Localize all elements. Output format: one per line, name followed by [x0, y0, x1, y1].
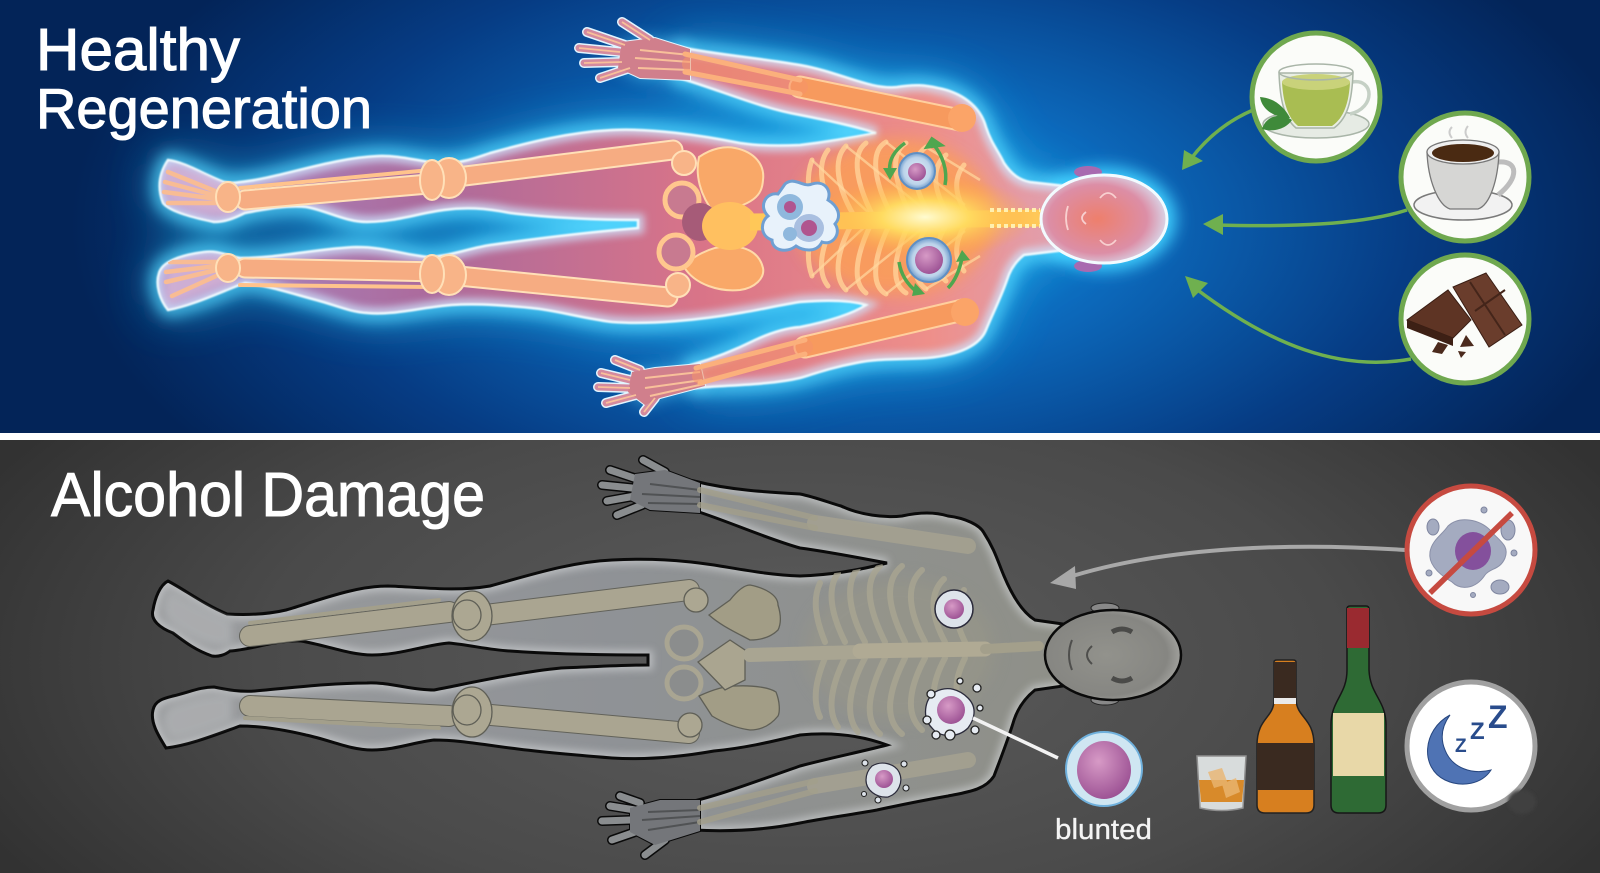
- title: healthy regeneration: Regeneration: [36, 77, 372, 141]
- leg bones: [245, 590, 689, 733]
- stem cell lower: [907, 238, 951, 282]
- hands: [602, 460, 700, 855]
- icon: sleep moon and zzz: Z: [1470, 718, 1485, 745]
- title: alcohol damage: Alcohol Damage: [51, 461, 485, 530]
- spine with glowing core: [750, 175, 1045, 259]
- knee and ankle joints: [216, 151, 696, 297]
- knee joints: [452, 588, 708, 737]
- pelvis: [659, 147, 763, 290]
- stem cell upper: [899, 153, 935, 189]
- panel: alcohol damage: [0, 440, 1600, 873]
- macrophage cell: [762, 181, 839, 250]
- spine and sternum: [750, 646, 1040, 655]
- label: blunted: blunted: [1055, 814, 1152, 846]
- icon: coffee: [1401, 113, 1529, 241]
- grey arrow to body: [1050, 547, 1405, 589]
- icon: no cell regeneration: [1407, 486, 1535, 614]
- head: [1045, 603, 1181, 705]
- icon: green tea: [1252, 33, 1380, 161]
- arrow: chocolate to body: [1185, 276, 1411, 362]
- icon: sleep moon and zzz: Z: [1488, 699, 1508, 735]
- rib cage: [812, 563, 968, 737]
- damaged cell on arm: [862, 760, 909, 803]
- arm bones: [685, 54, 979, 383]
- arrow: tea to body: [1182, 110, 1253, 170]
- pelvis: [667, 585, 780, 730]
- blunted cell: [1066, 732, 1142, 806]
- leg bones: [240, 150, 673, 297]
- callout line: [973, 718, 1058, 758]
- panel background: blue gradient: [0, 0, 1600, 433]
- smudge near sleep icon: [1508, 790, 1536, 814]
- title: healthy regeneration: Healthy: [36, 17, 241, 83]
- panel: healthy regeneration: [0, 0, 1600, 433]
- icon: sleep moon and zzz: Z: [1455, 736, 1467, 757]
- body silhouette: [152, 481, 1070, 831]
- grey human body: [152, 460, 1181, 855]
- arm bones: [700, 490, 968, 822]
- icon: sleep moon and zzz: [1407, 682, 1535, 810]
- hands: [579, 22, 705, 412]
- icon: whisky bottle: [1257, 660, 1314, 813]
- panel background: grey gradient: [0, 440, 1600, 873]
- arrow: coffee to body: [1203, 210, 1407, 235]
- body silhouette: [158, 47, 1065, 388]
- feet highlight: [163, 590, 232, 740]
- icon: chocolate: [1401, 255, 1529, 383]
- feet: [164, 165, 232, 305]
- icon: whisky glass: [1197, 756, 1246, 810]
- rib cage: [795, 139, 995, 295]
- glowing human body: [158, 22, 1167, 412]
- damaged cell upper: [935, 590, 973, 628]
- icon: wine bottle: [1331, 606, 1386, 813]
- green cycle arrows: [883, 139, 970, 296]
- head: [1041, 166, 1167, 272]
- damaged cell with fragments: [923, 678, 983, 740]
- title: healthy regeneration: [36, 17, 372, 141]
- body glow: [158, 38, 1176, 405]
